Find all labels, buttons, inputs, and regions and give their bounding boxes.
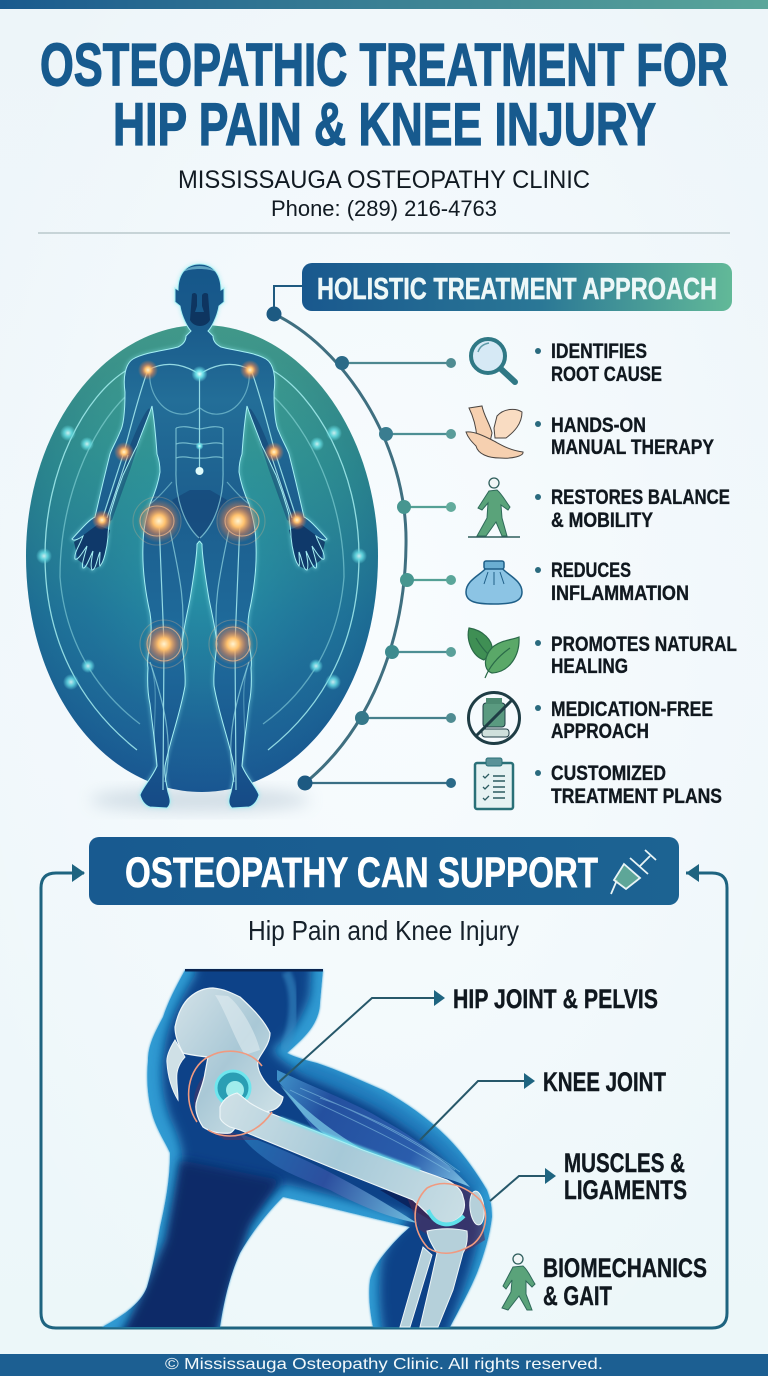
oval backdrop — [26, 325, 378, 812]
hip socket — [216, 1071, 250, 1105]
muscle and nerve lines — [102, 364, 297, 790]
frame with arrows — [41, 864, 727, 1328]
item: reduces inflammation: INFLAMMATION — [551, 582, 689, 605]
item: medication-free approach — [468, 692, 713, 744]
item: reduces inflammation — [466, 559, 689, 605]
body silhouette — [102, 960, 492, 1340]
banner: osteopathy can support — [89, 837, 679, 905]
footer — [0, 1354, 768, 1376]
banner: osteopathy can support: OSTEOPATHY CAN SUPPORT — [125, 849, 598, 897]
item: reduces inflammation: REDUCES — [551, 559, 631, 582]
phone number: Phone: (289) 216-4763 — [271, 196, 497, 221]
item: promotes natural healing — [468, 628, 737, 678]
subheading: Hip Pain and Knee Injury — [248, 915, 519, 946]
item: promotes natural healing: HEALING — [551, 655, 628, 678]
callout: muscles and ligaments: MUSCLES & — [564, 1148, 685, 1178]
callout: hip joint and pelvis: HIP JOINT & PELVIS — [453, 984, 658, 1014]
item: restores balance and mobility: RESTORES BALANCE — [551, 486, 730, 509]
pelvis bone — [167, 988, 283, 1133]
energy rings — [36, 370, 367, 750]
body silhouette — [72, 264, 327, 808]
item: customized treatment plans: CUSTOMIZED — [551, 762, 666, 785]
top bar — [0, 0, 768, 9]
subtitle: clinic name: MISSISSAUGA OSTEOPATHY CLINIC — [178, 166, 590, 194]
footer: © Mississauga Osteopathy Clinic. All rights reserved. — [165, 1356, 603, 1373]
figure: glowing human body in oval — [26, 264, 378, 812]
item: customized treatment plans: TREATMENT PLANS — [551, 785, 722, 808]
callout: knee joint: KNEE JOINT — [543, 1067, 666, 1097]
title — [40, 32, 728, 158]
item: customized treatment plans — [475, 758, 722, 809]
item: identifies root cause — [471, 339, 662, 386]
connector arc with nodes — [266, 286, 456, 790]
item: hands-on manual therapy — [466, 406, 714, 459]
icon: hands on foot — [466, 406, 523, 458]
item: identifies root cause: IDENTIFIES — [551, 340, 647, 363]
femur — [220, 1093, 464, 1224]
icon: magnifying glass — [471, 339, 515, 382]
illustration: hip and knee anatomy — [102, 960, 492, 1340]
glowing joints — [92, 360, 307, 668]
callout: biomechanics and gait — [502, 1253, 707, 1311]
item: hands-on manual therapy: MANUAL THERAPY — [551, 436, 714, 459]
muscles — [194, 1065, 485, 1255]
joint highlights — [189, 1051, 486, 1253]
icon: walking person — [502, 1254, 535, 1310]
item: restores balance and mobility: & MOBILITY — [551, 509, 653, 532]
item: hands-on manual therapy: HANDS-ON — [551, 414, 646, 437]
icon: clipboard checklist — [475, 758, 513, 809]
heading: holistic treatment approach — [302, 263, 732, 311]
icon: green leaves — [468, 628, 519, 678]
tibia and patella — [400, 1190, 486, 1327]
callout: biomechanics and gait: BIOMECHANICS — [543, 1253, 707, 1283]
callout: knee joint — [420, 1067, 666, 1140]
callout: hip joint and pelvis — [279, 984, 658, 1082]
callout: biomechanics and gait: & GAIT — [543, 1281, 612, 1311]
item: restores balance and mobility — [468, 478, 730, 537]
item: medication-free approach: APPROACH — [551, 720, 649, 743]
callout: muscles and ligaments: LIGAMENTS — [564, 1175, 687, 1205]
icon: syringe — [611, 850, 656, 894]
callout: muscles and ligaments — [490, 1148, 687, 1205]
icon: crossed out medication — [468, 692, 520, 744]
item: medication-free approach: MEDICATION-FREE — [551, 698, 713, 721]
icon: walking person — [468, 478, 520, 537]
item: identifies root cause: ROOT CAUSE — [551, 363, 662, 386]
icon: ice pack — [466, 561, 522, 604]
